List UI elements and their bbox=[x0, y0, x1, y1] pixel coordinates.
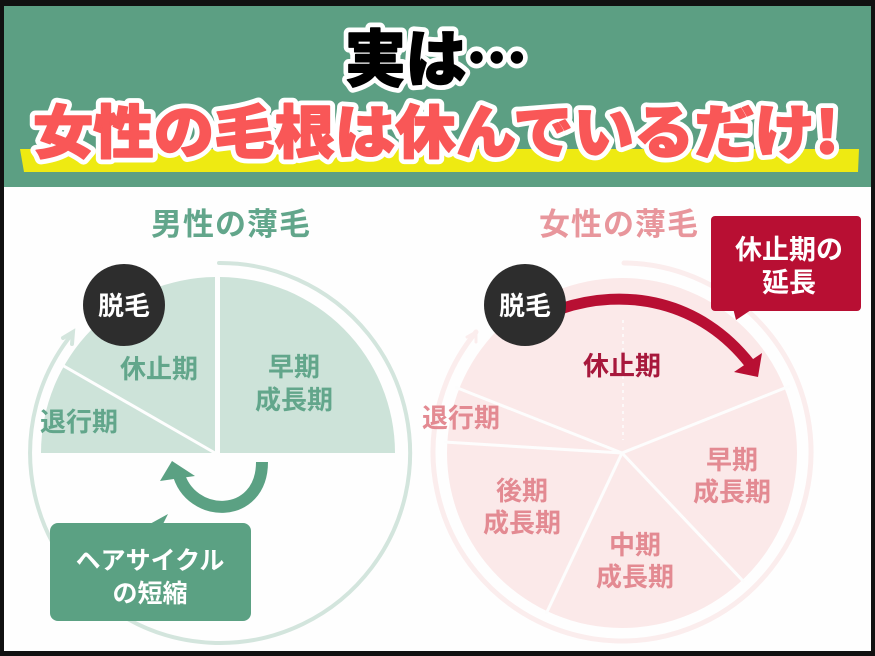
header band bbox=[4, 6, 871, 187]
pie bbox=[447, 278, 797, 628]
callout: extended rest: 休止期の bbox=[735, 235, 843, 265]
label: early growth: 成長期 bbox=[693, 477, 771, 507]
label: early growth: 早期 bbox=[706, 445, 758, 475]
cycle ring bbox=[433, 263, 811, 641]
pie wedge: early growth bbox=[220, 277, 395, 453]
panel: male thinning bbox=[30, 207, 410, 643]
extended rest arrow bbox=[560, 299, 762, 377]
badge: shedding bbox=[83, 264, 165, 346]
callout: extended rest bbox=[711, 216, 861, 320]
pie dividers bbox=[444, 386, 790, 614]
badge: shedding: 脱毛 bbox=[98, 291, 150, 321]
label: late growth: 後期 bbox=[496, 476, 548, 506]
label: mid growth: 成長期 bbox=[596, 562, 674, 592]
pie wedge: rest and regression bbox=[41, 277, 215, 453]
label: regression: 退行期 bbox=[40, 407, 118, 437]
title line 2: 女性の毛根は休んでいるだけ! bbox=[33, 86, 839, 170]
callout: shortened cycle bbox=[50, 514, 251, 621]
heading: female: 女性の薄毛 bbox=[539, 207, 699, 242]
title line 2: 女性の毛根は休んでいるだけ! bbox=[33, 86, 839, 170]
label: late growth: 成長期 bbox=[483, 508, 561, 538]
label: mid growth: 中期 bbox=[609, 530, 661, 560]
badge: shedding: 脱毛 bbox=[499, 291, 551, 321]
label: rest: 休止期 bbox=[583, 351, 661, 381]
cycle ring with arrow bbox=[30, 263, 410, 643]
callout: shortened cycle: の短縮 bbox=[112, 580, 188, 608]
heading: male: 男性の薄毛 bbox=[151, 207, 311, 242]
callout: shortened cycle: ヘアサイクル bbox=[76, 547, 224, 575]
title line 1: 実は… bbox=[345, 9, 527, 99]
yellow highlight bbox=[20, 149, 859, 172]
panel: female thinning bbox=[422, 207, 861, 641]
cycle arrow bbox=[160, 461, 262, 507]
badge: shedding bbox=[484, 264, 566, 346]
title line 1: 実は… bbox=[345, 9, 527, 99]
label: early growth: 早期 bbox=[268, 352, 320, 382]
label: early growth: 成長期 bbox=[255, 385, 333, 415]
label: regression: 退行期 bbox=[422, 403, 500, 433]
label: rest: 休止期 bbox=[120, 354, 198, 384]
callout: extended rest: 延長 bbox=[762, 268, 816, 298]
